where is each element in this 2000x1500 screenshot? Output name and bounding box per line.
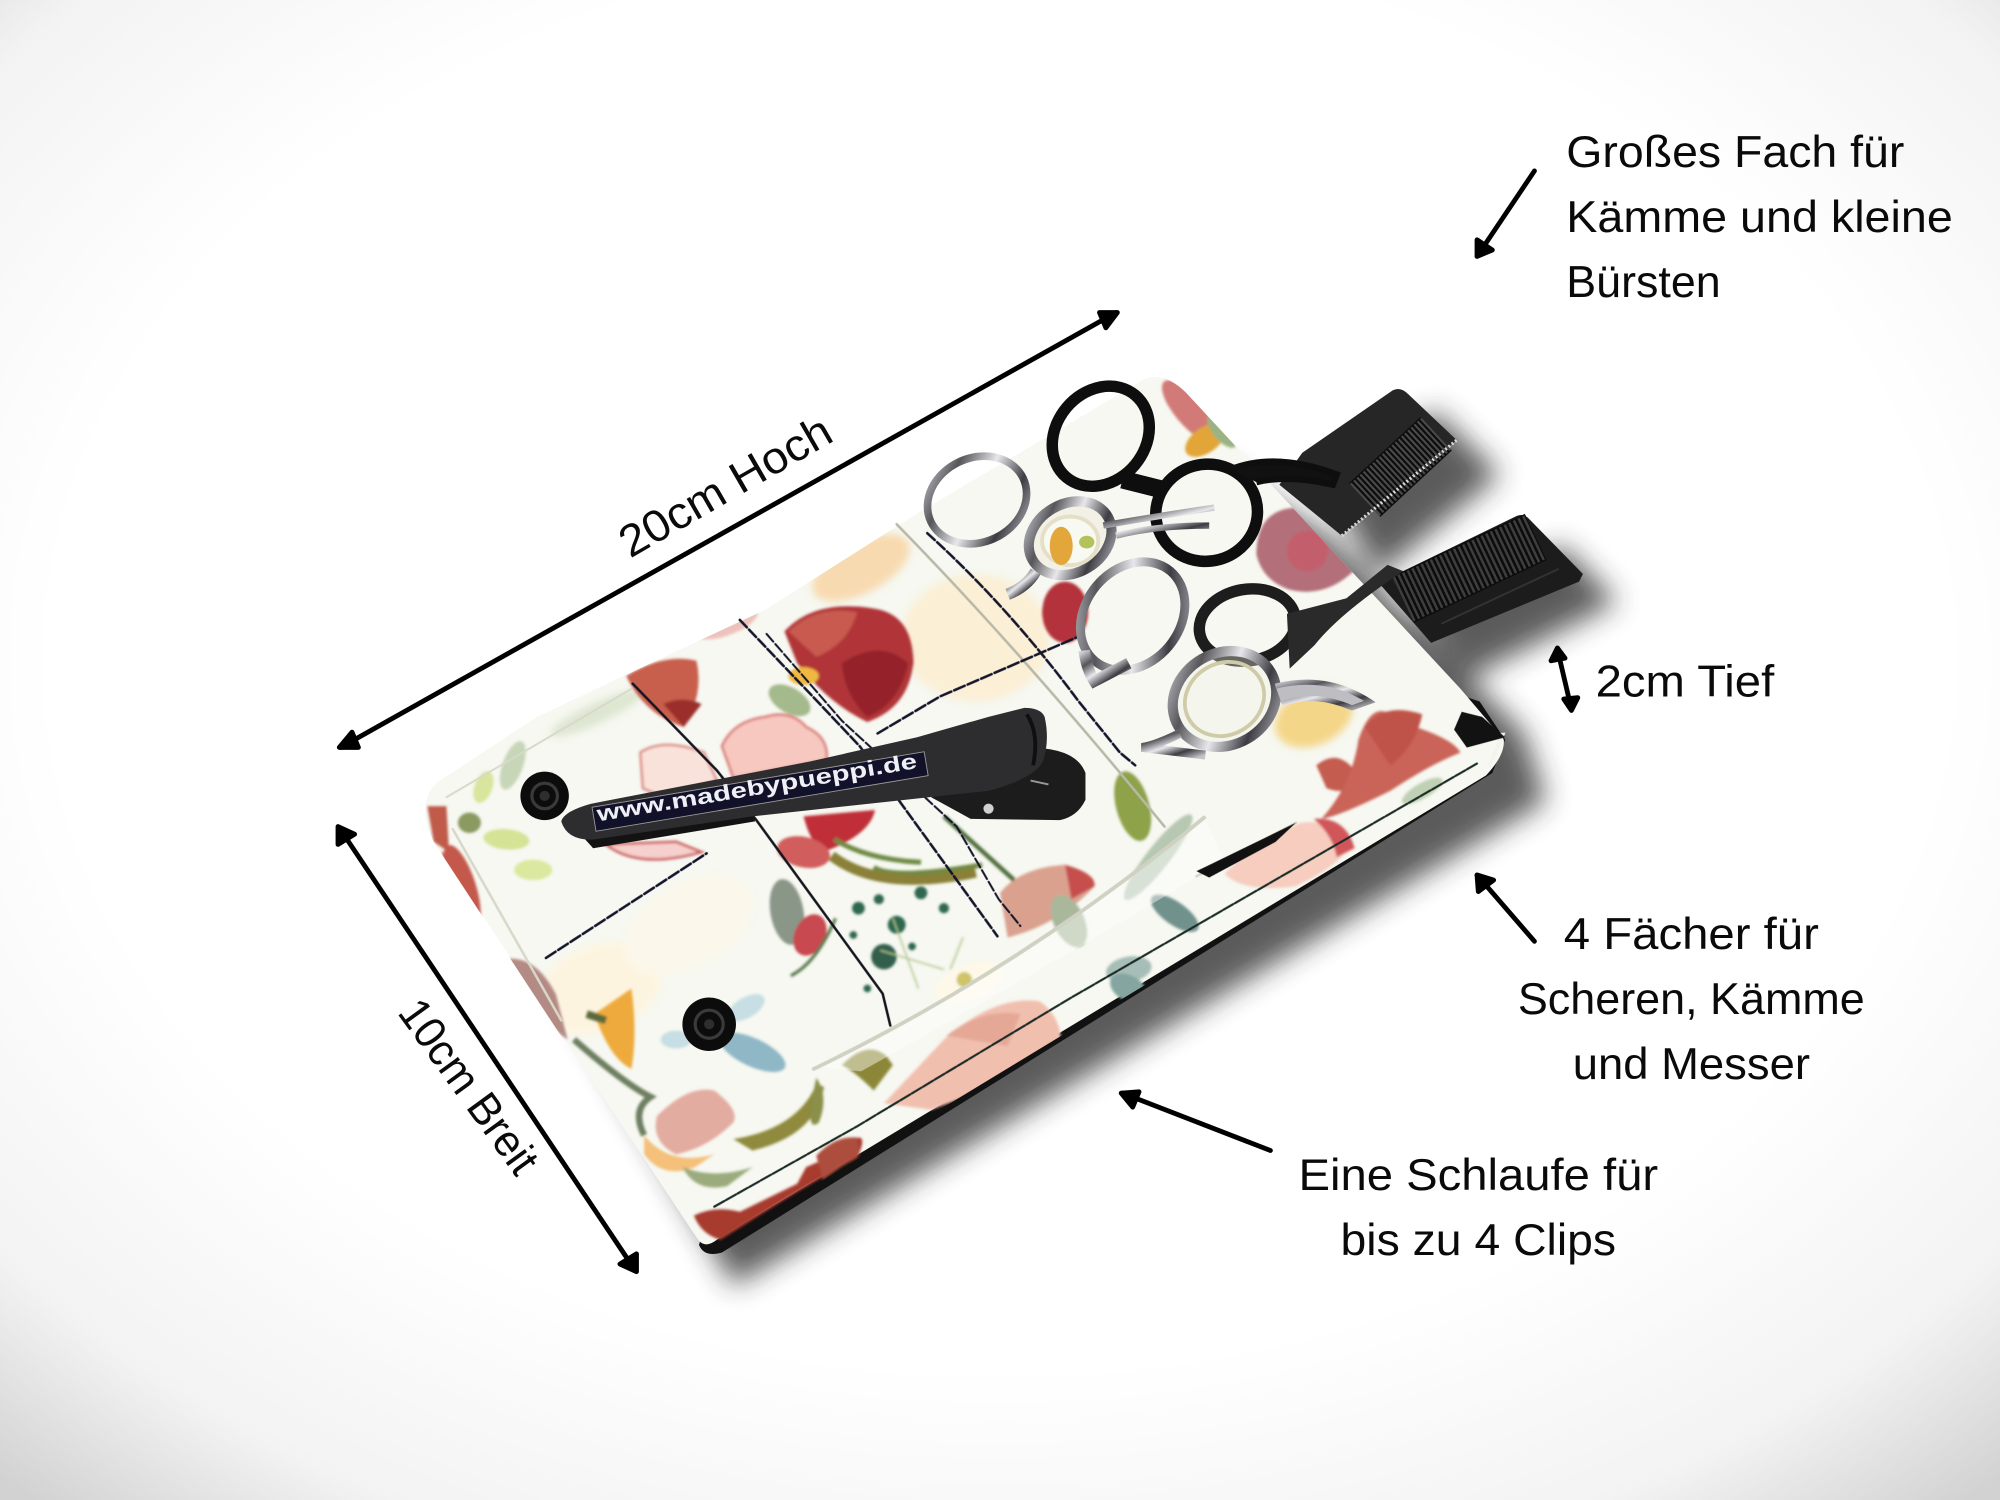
bud and gray leaf	[768, 878, 806, 946]
dark green dots	[852, 902, 865, 915]
pouch black backing	[699, 689, 1505, 1254]
brown rose	[504, 959, 568, 1040]
big red rose	[784, 606, 913, 722]
big pink flower	[884, 1000, 1061, 1110]
text: clip loop: Eine Schlaufe für	[1298, 1151, 1658, 1200]
upper tulip	[1256, 508, 1357, 592]
olive leaves	[733, 1084, 824, 1151]
text: four compartments: 4 Fächer für	[1564, 910, 1819, 959]
pouch with floral print	[425, 372, 1505, 1244]
pale shade of the pocket fold	[840, 832, 1190, 1072]
comb: front	[1379, 515, 1583, 643]
snap button: top	[520, 772, 569, 820]
snap button: bottom	[682, 997, 736, 1051]
clip label	[592, 748, 928, 831]
coral flower	[1316, 758, 1358, 791]
drop shadow of pouch and combs	[510, 411, 1617, 1286]
arrow: height dimension	[339, 312, 1117, 747]
salmon lower flower	[656, 1089, 735, 1154]
text: large compartment: Großes Fach für	[1566, 128, 1904, 177]
arrow: width dimension	[338, 827, 636, 1272]
white daisy	[938, 964, 994, 998]
salmon flower	[626, 659, 699, 727]
orange pansy	[594, 989, 635, 1069]
pale rose	[640, 745, 717, 797]
text: clip loop	[1298, 1151, 1658, 1265]
deep red bottom flower	[694, 1137, 862, 1240]
tulips	[1000, 865, 1095, 938]
blue flower	[722, 1031, 787, 1074]
slot in the front pocket	[1196, 823, 1296, 878]
hair clip	[561, 708, 1085, 848]
green leaves	[1112, 770, 1153, 843]
text: large compartment: Bürsten	[1566, 258, 1721, 307]
label: 20cm Hoch: 20cm Hoch	[611, 406, 841, 567]
clip label: www.madebypueppi.de	[594, 748, 919, 827]
left edge red	[427, 806, 449, 852]
arrow: four compartments	[1477, 875, 1534, 941]
arrow: large compartment	[1477, 171, 1534, 256]
text: four compartments	[1518, 910, 1865, 1089]
silver scissor pair	[913, 440, 1370, 766]
arrow: depth	[1551, 648, 1578, 710]
text: depth: 2cm Tief	[1596, 657, 1775, 706]
scissors and shears	[913, 366, 1401, 766]
arrow: clip loop	[1121, 1092, 1270, 1151]
top red	[1160, 379, 1210, 436]
text: large compartment	[1566, 128, 1953, 307]
floral print	[427, 372, 1460, 1240]
text: large compartment: Kämme und kleine	[1566, 193, 1953, 242]
black scissor pair back	[1032, 366, 1401, 669]
label: 10cm Breit: 10cm Breit	[389, 990, 549, 1184]
red inside pocket	[1042, 582, 1088, 643]
comb: back	[1279, 389, 1457, 536]
text: four compartments: Scheren, Kämme	[1518, 975, 1865, 1024]
black lining corner	[1454, 712, 1505, 747]
text: four compartments: und Messer	[1573, 1040, 1810, 1089]
crimson under clip	[804, 810, 875, 852]
stitching and panel edges	[446, 524, 1503, 1207]
pale carnation	[722, 715, 827, 778]
text: clip loop: bis zu 4 Clips	[1341, 1216, 1616, 1265]
